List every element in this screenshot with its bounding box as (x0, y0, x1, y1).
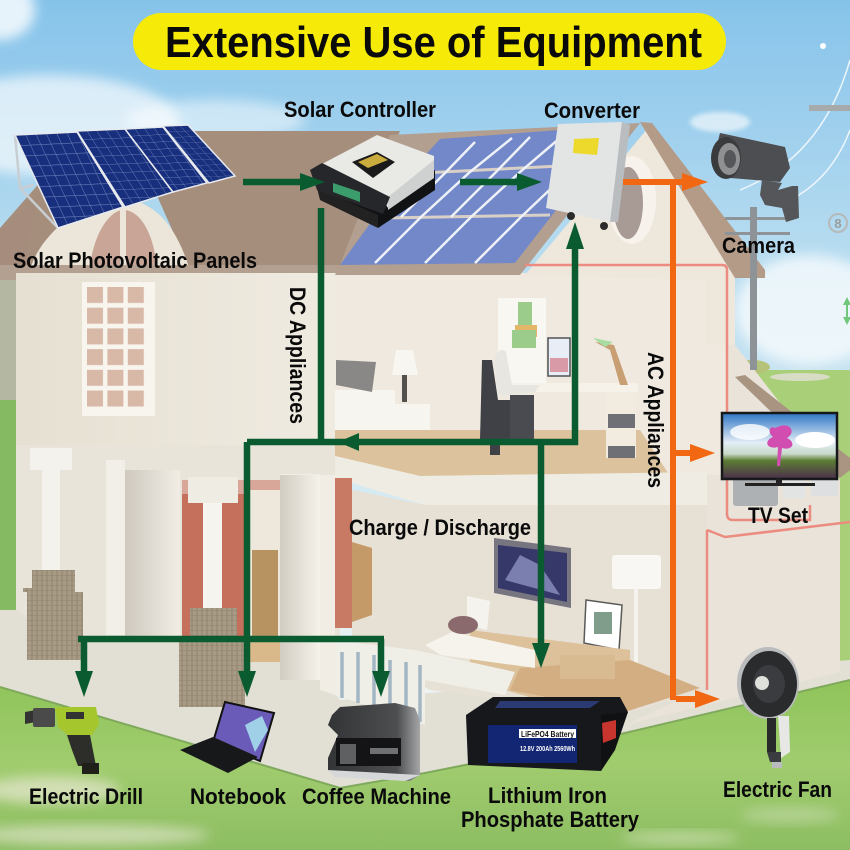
label: solar photovoltaic panels: Solar Photovoltaic Panels (13, 248, 257, 273)
label: charge / discharge: Charge / Discharge (349, 515, 531, 540)
window (82, 282, 155, 416)
icon: lithium battery: LiFePO4 Battery (521, 729, 574, 739)
lower wall (16, 445, 340, 640)
distant tree and grass on the left (0, 270, 16, 400)
label: lithium iron phosphate battery (461, 783, 640, 832)
icon: coffee machine (328, 703, 420, 781)
downstairs furniture (335, 538, 700, 725)
roof solar array (340, 130, 560, 265)
label: dc appliances: DC Appliances (285, 287, 310, 424)
title banner (133, 13, 726, 70)
left column (23, 448, 83, 660)
wall tv (494, 538, 571, 608)
desk (510, 383, 638, 392)
bookshelf (498, 298, 546, 384)
lower room (352, 490, 707, 715)
icon: solar photovoltaic panels (15, 125, 235, 228)
label: electric fan: Electric Fan (723, 777, 832, 802)
house (0, 122, 850, 788)
distant grass on the right (735, 370, 850, 670)
dining room through doorway (250, 490, 280, 662)
label: converter: Converter (544, 98, 640, 123)
arrows: ac wiring (orange) (623, 173, 720, 708)
framed pictures (467, 596, 622, 650)
sofa and lamp (335, 350, 430, 430)
floor slab (335, 456, 707, 505)
upper room (335, 273, 727, 475)
icon: lithium battery (466, 697, 628, 771)
monitor (548, 338, 570, 376)
label: lithium iron phosphate battery: Lithium Iron (488, 783, 607, 808)
porch pier (280, 474, 372, 695)
right annex wall (625, 345, 840, 725)
right gable roof edge (640, 122, 765, 278)
coffee table (425, 632, 535, 668)
lawn foreground (0, 680, 850, 850)
icon: tv set (722, 413, 838, 506)
label: coffee machine: Coffee Machine (302, 784, 451, 809)
person and office chair (480, 350, 540, 455)
icon: solar controller (310, 135, 435, 228)
porch floor (0, 610, 850, 788)
gable wall (525, 128, 735, 345)
red door and column (179, 477, 280, 707)
label: notebook: Notebook (190, 784, 287, 809)
left wall (16, 235, 340, 445)
label: solar controller: Solar Controller (284, 97, 436, 122)
label: lithium iron phosphate battery: Phosphate Battery (461, 807, 640, 832)
icon: notebook (180, 702, 274, 773)
red wiring (525, 265, 850, 690)
icon: electric drill (25, 707, 99, 774)
icon: electric fan (737, 647, 799, 768)
tv cabinet and rug (470, 630, 700, 712)
label: ac appliances: AC Appliances (643, 352, 668, 488)
icon: security camera (711, 133, 799, 222)
arcade recess (125, 470, 180, 640)
label: electric drill: Electric Drill (29, 784, 143, 809)
upstairs furniture (335, 298, 638, 458)
floor lamp (612, 555, 661, 692)
title text: Extensive Use of Equipment (165, 18, 702, 67)
main roof (0, 123, 640, 280)
utility pole and ornaments: 8 (834, 216, 842, 231)
icon: converter (546, 122, 630, 230)
round window (608, 156, 656, 244)
label: camera: Camera (722, 233, 796, 258)
striped sofa (335, 640, 515, 725)
utility pole and ornaments (725, 105, 850, 370)
arrows: dc wiring (green) (75, 173, 584, 697)
icon: lithium battery: 12.8V 200Ah 2560Wh (520, 744, 575, 753)
drawers (606, 392, 636, 458)
label: tv set: TV Set (748, 503, 809, 528)
